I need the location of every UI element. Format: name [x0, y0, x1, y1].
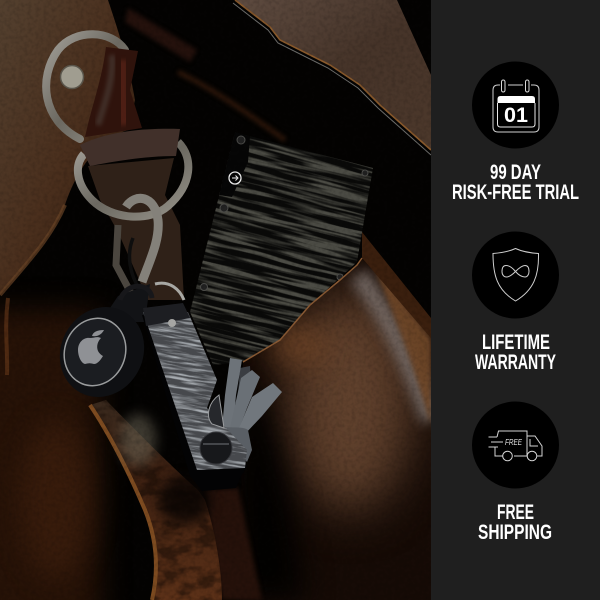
photo: leather bag with key organizer and wallet — [0, 0, 462, 600]
benefit: free shipping — [472, 402, 559, 544]
heading: shipping: SHIPPING — [478, 521, 552, 544]
leather loop tab — [85, 47, 142, 137]
key notch — [208, 395, 224, 428]
keys — [223, 358, 282, 462]
shield badge — [472, 232, 559, 318]
upper D-ring — [46, 34, 125, 139]
hanging leather tab — [88, 158, 184, 300]
inner dark strap — [125, 8, 197, 62]
right side panel — [431, 0, 600, 600]
lower ring — [78, 142, 188, 217]
leather grain — [0, 0, 431, 600]
leather bag upper left panel — [0, 0, 135, 295]
calendar badge — [472, 62, 559, 148]
truck badge: FREE — [505, 438, 523, 447]
top right leather flap — [235, 0, 431, 150]
back strip of pocket — [362, 232, 431, 340]
rivet — [60, 66, 84, 88]
apple logo — [78, 330, 104, 364]
organizer pin — [168, 319, 176, 327]
wallet in pocket — [190, 137, 373, 364]
benefit: lifetime warranty — [472, 232, 559, 374]
carabiner clip — [116, 198, 184, 300]
AirTag holder — [60, 284, 154, 397]
heading: lifetime: LIFETIME — [482, 331, 550, 354]
thumb screw — [200, 432, 232, 464]
heading: free: FREE — [497, 501, 534, 524]
key organizer underside — [142, 315, 236, 490]
benefit: 99 day risk-free trial — [452, 62, 579, 204]
heading: warranty: WARRANTY — [475, 351, 556, 374]
heading: 99 day: 99 DAY — [490, 161, 541, 184]
brown leather strap — [90, 400, 225, 600]
wallet logo badge — [229, 172, 241, 184]
truck badge — [472, 402, 559, 488]
dark reddish strip under organizer — [205, 488, 262, 600]
key organizer body — [143, 303, 247, 470]
calendar badge: 01 — [504, 104, 528, 127]
wallet screws — [200, 136, 368, 290]
front leather pocket — [243, 259, 431, 600]
lower left leather panel — [0, 298, 100, 600]
leather tube on ring — [80, 129, 180, 166]
